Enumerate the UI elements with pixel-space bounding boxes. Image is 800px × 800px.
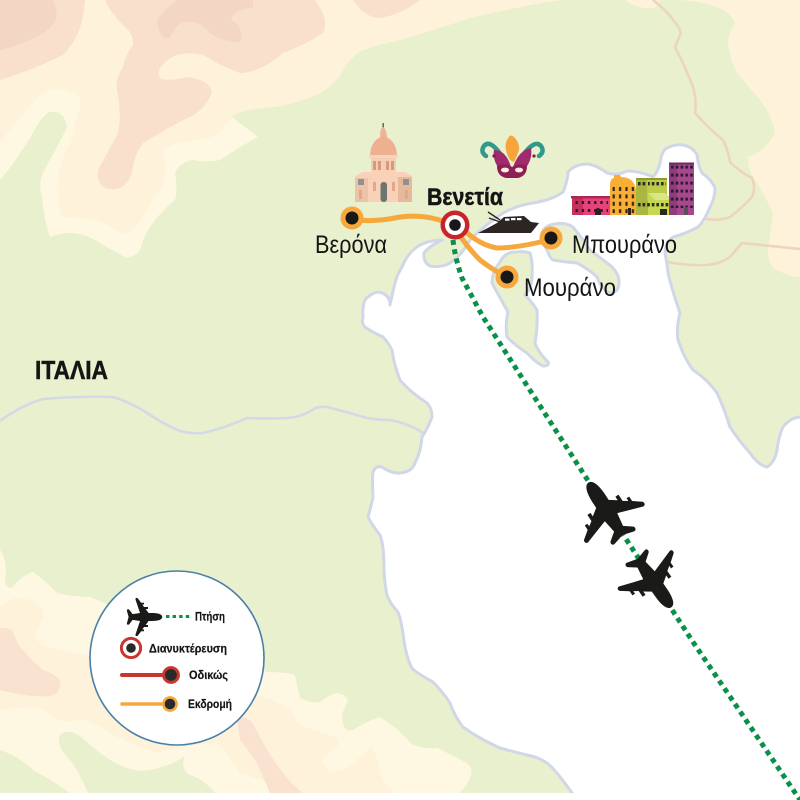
white strip at the bottom edge [0, 793, 800, 800]
terrain: northern highlands [0, 0, 560, 258]
river [0, 397, 423, 433]
icon: cathedral [355, 123, 412, 202]
legend [90, 571, 264, 745]
island: Murano [492, 252, 548, 366]
legend: overnight stay: Διανυκτέρευση [149, 642, 227, 656]
marker: Burano [542, 229, 560, 247]
plane 1 [559, 463, 654, 557]
label: Verona: Βερόνα [315, 231, 387, 259]
island: Burano [542, 223, 619, 293]
legend: by road [122, 668, 228, 682]
sea [362, 145, 800, 800]
label: Italy: ΙΤΑΛΙΑ [35, 355, 108, 385]
excursion routes [352, 216, 545, 276]
terrain: southern highlands [0, 550, 471, 793]
legend: excursion: Εκδρομή [188, 697, 232, 711]
regional borders [653, 0, 800, 265]
label: Murano: Μουράνο [524, 274, 616, 302]
plane 2 [608, 537, 699, 626]
marker: Murano [498, 268, 516, 286]
marker: Venice overnight stay [440, 210, 470, 240]
legend: flight: Πτήση [195, 610, 225, 624]
legend: overnight stay [121, 638, 227, 658]
legend: excursion [122, 697, 232, 711]
label: Burano: Μπουράνο [572, 231, 677, 259]
icon: coloured houses of Burano [571, 162, 694, 215]
icon: boat [478, 212, 539, 233]
label: Venice: Βενετία [427, 184, 503, 211]
icon: carnival mask [482, 136, 543, 178]
terrain: north-east highlands [625, 0, 800, 277]
legend: flight [127, 598, 225, 636]
marker: Verona [343, 209, 361, 227]
flight route dotted line [453, 240, 800, 800]
legend: by road: Οδικώς [189, 668, 228, 682]
